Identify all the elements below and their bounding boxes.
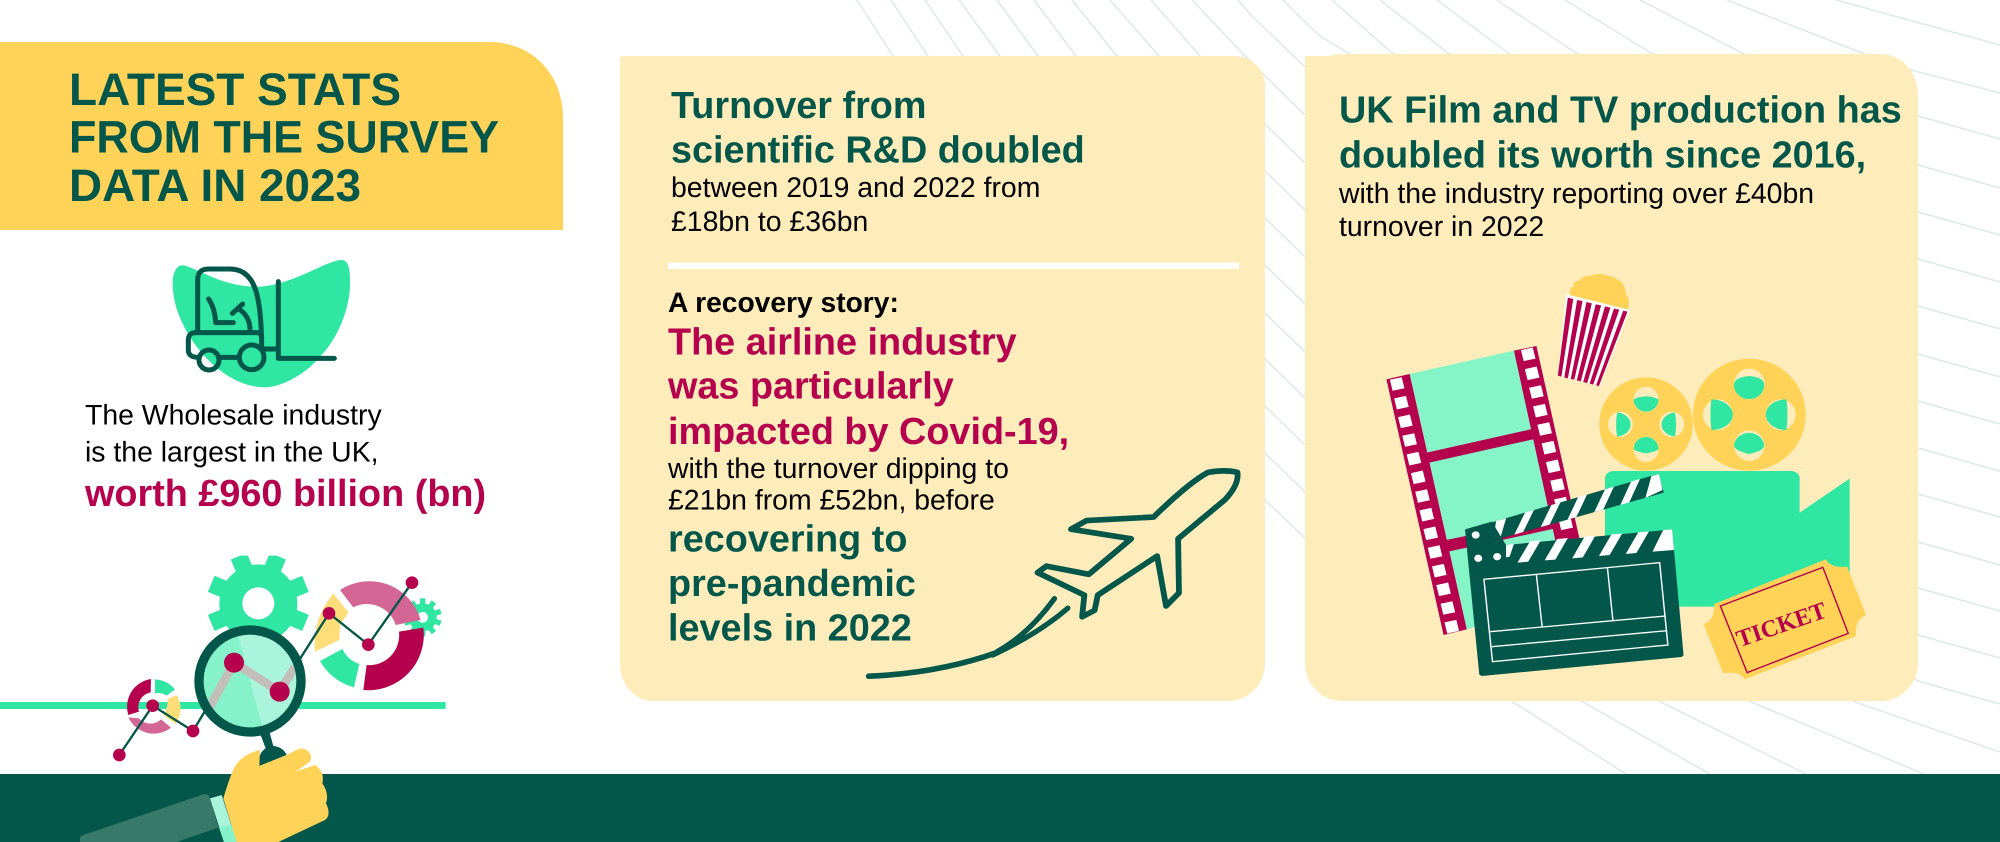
text: film and TV: doubled its worth since 2016, <box>1339 134 1866 176</box>
icon: small gear <box>405 598 441 636</box>
mint baseline <box>0 702 446 709</box>
card background <box>1305 54 1918 701</box>
chart: large donut <box>315 581 424 690</box>
icon: cuff <box>210 795 237 842</box>
title <box>69 64 499 211</box>
chart: small donut <box>127 679 181 734</box>
text: film and TV <box>1338 90 1902 243</box>
icon: popcorn <box>1558 274 1630 386</box>
text: recovery story: impacted by Covid-19, <box>668 411 1069 453</box>
icon: airplane with trail <box>869 471 1238 676</box>
text: wholesale industry <box>84 400 486 515</box>
title: FROM THE SURVEY <box>69 112 499 162</box>
icon: ticket: TICKET <box>1733 598 1830 653</box>
divider <box>668 262 1239 269</box>
icon: ticket <box>1704 559 1866 679</box>
panel: scientific and airline card <box>620 56 1265 701</box>
illustration: magnifier over charts <box>0 556 446 842</box>
text: scientific R&D: £18bn to £36bn <box>671 206 868 238</box>
text: recovery story: A recovery story: <box>668 286 899 318</box>
icon: forklift on green blob <box>173 260 350 387</box>
text: recovery story: with the turnover dipping to <box>667 453 1009 485</box>
icon: movie camera <box>1599 359 1850 607</box>
text: recovery story: pre-pandemic <box>668 563 916 605</box>
text: film and TV: with the industry reporting over £40bn <box>1338 178 1814 210</box>
text: recovery story: was particularly <box>667 366 954 408</box>
icon: magnifier lens <box>199 630 301 733</box>
chart: trend line <box>113 576 418 761</box>
title: LATEST STATS <box>69 64 401 115</box>
icon: clapperboard <box>1465 474 1684 676</box>
bottom band <box>0 774 2000 842</box>
icon: film reel strip <box>1386 346 1586 635</box>
icon: large gear <box>211 556 305 650</box>
illustration: cinema objects <box>1386 274 1866 679</box>
text: recovery story: £21bn from £52bn, before <box>668 485 995 517</box>
text: recovery story: levels in 2022 <box>668 608 912 650</box>
text: scientific R&D: between 2019 and 2022 from <box>671 172 1040 204</box>
text: recovery story: recovering to <box>668 519 907 561</box>
text: wholesale industry: is the largest in the UK, <box>85 436 379 468</box>
card background <box>620 56 1265 701</box>
text: scientific R&D: Turnover from <box>671 85 926 127</box>
panel: header <box>0 42 563 230</box>
text: wholesale industry: The Wholesale industry <box>85 400 382 432</box>
text: recovery story: The airline industry <box>668 321 1017 363</box>
text: wholesale industry: worth £960 billion (bn) <box>84 473 486 515</box>
text: recovery story <box>667 286 1069 650</box>
text: scientific R&D: scientific R&D doubled <box>671 130 1085 172</box>
text: film and TV: UK Film and TV production has <box>1339 90 1902 132</box>
title: DATA IN 2023 <box>69 160 361 211</box>
header background <box>0 42 563 230</box>
icon: hand <box>223 748 329 842</box>
icon: arm sleeve <box>80 794 218 842</box>
panel: film and TV card <box>1305 54 1918 701</box>
text: scientific R&D <box>671 85 1085 238</box>
text: film and TV: turnover in 2022 <box>1339 211 1544 243</box>
icon: magnifier handle <box>259 732 287 766</box>
